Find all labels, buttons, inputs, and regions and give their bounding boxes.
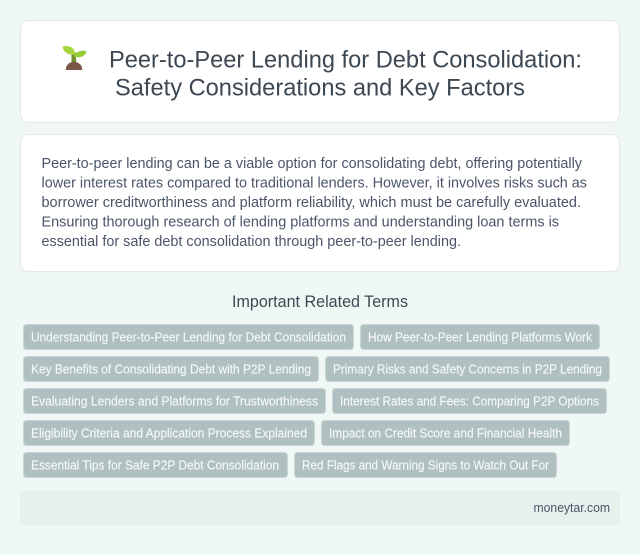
chip: understanding: Understanding Peer-to-Peer Lending for Debt Consolidation (31, 330, 346, 344)
chip: primary risks: Primary Risks and Safety Concerns in P2P Lending (333, 362, 602, 376)
chip: red flags: Red Flags and Warning Signs to Watch Out For (302, 458, 550, 472)
chip: essential tips (24, 452, 288, 478)
chip: understanding (24, 324, 354, 350)
icon: sprout (62, 46, 86, 70)
chip: credit score (322, 420, 570, 446)
text block: summary paragraph: borrower creditworthiness and platform reliability, which must be carefully evaluated. (42, 194, 581, 211)
text block: summary paragraph: Ensuring thorough research of lending platforms and understanding loan terms is (42, 214, 559, 230)
footer (20, 491, 620, 525)
chip: credit score: Impact on Credit Score and Financial Health (329, 426, 562, 440)
title: Peer-to-Peer Lending for Debt Consolidation: (109, 46, 582, 74)
chip: red flags (294, 452, 556, 478)
title: Safety Considerations and Key Factors (115, 74, 525, 102)
panel: summary (20, 134, 620, 272)
chip: key benefits: Key Benefits of Consolidating Debt with P2P Lending (31, 362, 311, 376)
heading: related terms: Important Related Terms (232, 293, 408, 311)
chip: eligibility (24, 420, 314, 446)
chip: how platforms work (360, 324, 600, 350)
title (109, 46, 582, 102)
chip: evaluating lenders: Evaluating Lenders and Platforms for Trustworthiness (31, 394, 318, 408)
text block: summary paragraph: essential for safe debt consolidation through peer-to-peer lending. (42, 233, 461, 250)
panel: term chips (24, 324, 610, 478)
text block: summary paragraph: Peer-to-peer lending can be a viable option for consolidating debt, offering potentially (42, 155, 582, 172)
chip: how platforms work: How Peer-to-Peer Lending Platforms Work (368, 330, 592, 344)
chip: essential tips: Essential Tips for Safe P2P Debt Consolidation (31, 458, 279, 472)
chip: evaluating lenders (24, 388, 326, 414)
chip: interest rates (332, 388, 606, 414)
chip: interest rates: Interest Rates and Fees: Comparing P2P Options (340, 394, 599, 408)
chip: key benefits (24, 356, 318, 382)
text block: summary paragraph (42, 155, 587, 250)
text block: summary paragraph: lower interest rates compared to traditional lenders. However, it involves risks such as (42, 174, 587, 191)
panel: title card (20, 20, 620, 122)
footer source: moneytar.com (534, 501, 610, 515)
chip: eligibility: Eligibility Criteria and Application Process Explained (31, 426, 307, 440)
chip: primary risks (326, 356, 610, 382)
